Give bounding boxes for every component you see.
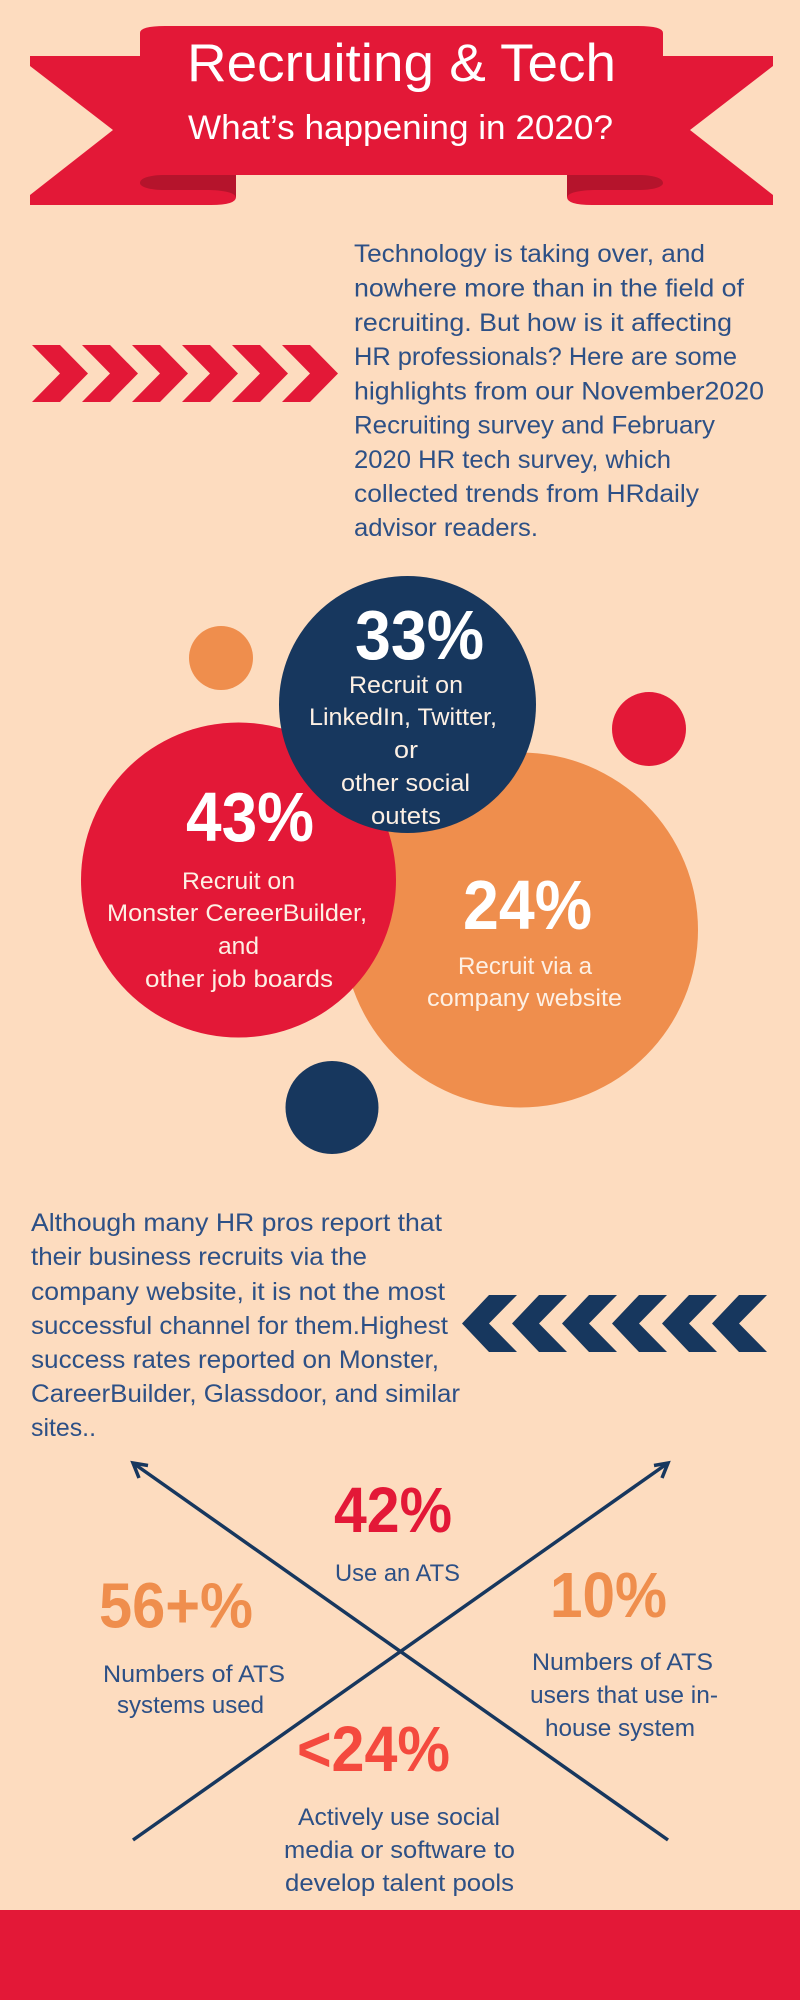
stat: 56+% ATS systems: systems used	[117, 1692, 264, 1719]
bubble: 33% social: Recruit on	[349, 672, 463, 699]
ribbon fold right	[567, 175, 663, 198]
ribbon fold left	[140, 175, 236, 198]
body text: channel success: company website, it is not the most	[31, 1278, 445, 1306]
intro text: recruiting. But how is it affecting	[354, 309, 732, 337]
intro text: advisor readers.	[354, 514, 538, 542]
bubble: 33% social	[279, 576, 536, 833]
body text: channel success: their business recruits via the	[31, 1243, 367, 1271]
bubble: 24% company website	[343, 752, 698, 1108]
stat: under 24% talent pools: <24%	[297, 1713, 450, 1785]
stat: 42% use an ATS: Use an ATS	[335, 1560, 460, 1587]
bubble: 33% social: or	[394, 737, 418, 764]
subtitle: What’s happening in 2020?	[188, 109, 613, 147]
banner: ribbon with title	[30, 26, 773, 205]
bubble: 33% social: 33%	[355, 596, 484, 674]
stat: under 24% talent pools: media or software to	[284, 1837, 515, 1864]
body text: channel success: successful channel for them.Highest	[31, 1312, 448, 1340]
chevron arrows pointing left	[462, 1295, 767, 1352]
intro text: 2020 HR tech survey, which	[354, 446, 671, 474]
stat: under 24% talent pools: develop talent pools	[285, 1870, 514, 1897]
stat: 56+% ATS systems: Numbers of ATS	[103, 1661, 285, 1688]
title: Recruiting & Tech	[187, 34, 616, 93]
body text: channel success	[31, 1209, 460, 1442]
intro text	[354, 240, 764, 542]
bubble: 43% job boards	[81, 722, 396, 1038]
body text: channel success: sites..	[31, 1414, 96, 1442]
crossed arrows	[133, 1463, 668, 1840]
stat: 42% use an ATS	[334, 1474, 460, 1587]
stat: 10% in-house: 10%	[550, 1559, 667, 1631]
bubble: 43% job boards: Recruit on	[182, 868, 295, 895]
bubble: 33% social: LinkedIn, Twitter,	[309, 704, 497, 731]
bubble: 43% job boards: Monster CereerBuilder,	[107, 900, 367, 927]
bubble: 43% job boards: other job boards	[145, 966, 333, 993]
stat: 10% in-house	[530, 1559, 718, 1742]
chevron arrows pointing right	[32, 345, 338, 402]
intro text: collected trends from HRdaily	[354, 480, 700, 508]
intro text: Recruiting survey and February	[354, 412, 716, 440]
decorative dot red	[612, 692, 686, 766]
stat: under 24% talent pools	[284, 1713, 515, 1897]
bubble: 43% job boards: and	[218, 933, 259, 960]
bubble: 24% company website: company website	[427, 985, 622, 1012]
body text: channel success: CareerBuilder, Glassdoor, and similar	[31, 1380, 460, 1408]
stat: 56+% ATS systems	[99, 1570, 285, 1719]
bubble: 24% company website: Recruit via a	[458, 953, 593, 980]
ribbon shape	[30, 26, 773, 205]
stat: 10% in-house: Numbers of ATS	[532, 1649, 713, 1676]
bubble: 43% job boards: 43%	[186, 778, 314, 856]
bubble: 24% company website: 24%	[463, 866, 592, 944]
body text: channel success: Although many HR pros report that	[31, 1209, 442, 1237]
decorative dot orange	[189, 626, 253, 690]
stat: 56+% ATS systems: 56+%	[99, 1570, 253, 1642]
stat: under 24% talent pools: Actively use social	[298, 1804, 500, 1831]
footer band	[0, 1910, 800, 2000]
intro text: HR professionals? Here are some	[354, 343, 737, 371]
intro text: Technology is taking over, and	[354, 240, 705, 268]
stat: 10% in-house: users that use in-	[530, 1682, 718, 1709]
decorative dot navy	[286, 1061, 378, 1154]
stat: 10% in-house: house system	[545, 1715, 695, 1742]
bubble: 33% social: outets	[371, 803, 441, 830]
intro text: nowhere more than in the field of	[354, 274, 744, 302]
intro text: highlights from our November2020	[354, 378, 764, 406]
bubble: 33% social: other social	[341, 770, 470, 797]
body text: channel success: success rates reported on Monster,	[31, 1346, 439, 1374]
stat: 42% use an ATS: 42%	[334, 1474, 452, 1546]
